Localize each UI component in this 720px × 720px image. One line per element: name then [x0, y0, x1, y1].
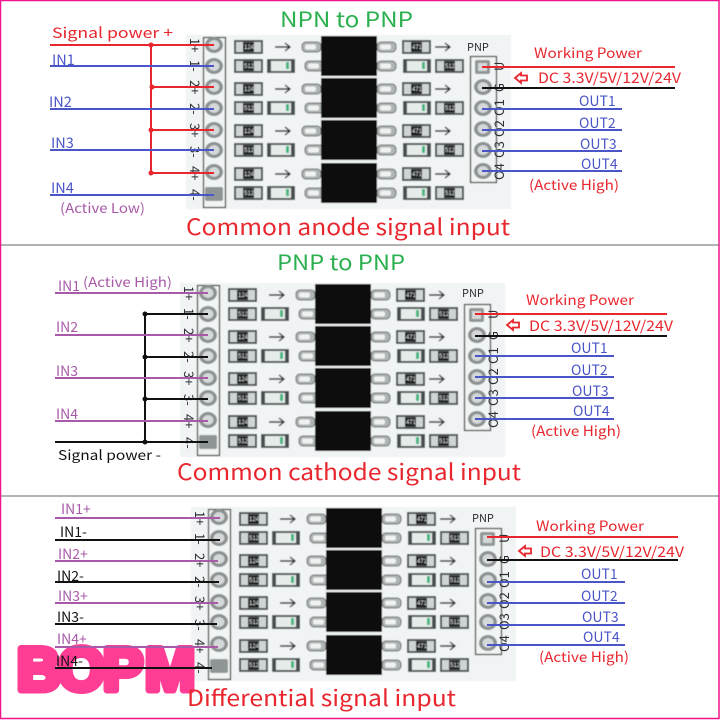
wiring: signal power +: [50, 22, 214, 176]
inputs IN1 to IN4: IN3: [51, 132, 74, 153]
working power and outputs: OUT3: [580, 134, 617, 154]
differential inputs: IN2-: [57, 566, 84, 586]
differential inputs: IN4+: [57, 629, 87, 649]
circuit board 2: 3-: [180, 394, 199, 406]
circuit board 1: O1: [489, 99, 508, 116]
differential inputs: IN1-: [60, 522, 87, 542]
working power and outputs: OUT1: [581, 564, 618, 584]
circuit board 3: 4-: [191, 662, 210, 674]
working power and outputs: OUT1: [579, 91, 616, 111]
circuit board 1: 1-: [186, 60, 205, 72]
inputs IN1 to IN4: [49, 49, 214, 217]
inputs IN1 to IN4: IN3: [56, 361, 78, 381]
circuit board 2: 1+: [180, 286, 199, 300]
working power and outputs: OUT3: [582, 607, 619, 627]
circuit board 1: PNP: [467, 39, 489, 55]
inputs IN1 to IN4: IN2: [49, 91, 72, 112]
working power and outputs: OUT2: [581, 586, 618, 606]
circuit board 2: O2: [483, 368, 502, 385]
inputs IN1 to IN4: IN4: [51, 177, 74, 198]
working power and outputs: Working Power: [534, 43, 643, 63]
circuit board 2: 2-: [180, 351, 199, 363]
circuit board 3: O1: [494, 571, 513, 588]
inputs IN1 to IN4: (Active High): [83, 271, 172, 291]
working power and outputs: DC 3.3V/5V/12V/24V: [529, 315, 674, 336]
circuit board 1: O3: [489, 141, 508, 158]
panel: PNP to PNP: [55, 247, 674, 487]
circuit board 2: PNP: [462, 285, 484, 301]
circuit board 1: 2+: [186, 80, 205, 94]
circuit board 3: U: [494, 534, 513, 543]
circuit board 1: 3-: [186, 146, 205, 158]
circuit board 3: O2: [494, 592, 513, 609]
circuit board 1: 1+: [186, 38, 205, 52]
working power and outputs: OUT4: [583, 627, 620, 647]
circuit board 3: G: [494, 555, 513, 564]
circuit board 3: O3: [494, 613, 513, 630]
working power and outputs: [487, 516, 685, 667]
wiring: signal power -: [55, 312, 208, 464]
working power and outputs: Working Power: [536, 516, 645, 536]
inputs IN1 to IN4: IN1: [58, 276, 80, 296]
working power and outputs: OUT2: [579, 113, 616, 133]
differential inputs: IN3-: [57, 607, 84, 627]
circuit board 1: 2-: [186, 103, 205, 115]
circuit board 1: 4-: [186, 189, 205, 201]
circuit board 2: 3+: [180, 371, 199, 385]
circuit board 2: 2+: [180, 328, 199, 342]
circuit board 2: [180, 283, 505, 457]
circuit board 1: 3+: [186, 123, 205, 137]
differential inputs: IN2+: [58, 544, 88, 564]
circuit board 2: 1-: [180, 308, 199, 320]
circuit board 3: 1+: [191, 511, 210, 525]
circuit board 3: 2+: [191, 553, 210, 567]
working power and outputs: OUT3: [572, 381, 609, 401]
logo: BOPM: BOPM: [17, 636, 195, 703]
working power and outputs: OUT1: [571, 338, 608, 358]
circuit board 1: [186, 35, 511, 209]
working power and outputs: OUT4: [573, 401, 610, 421]
differential inputs: IN4-: [56, 651, 83, 671]
circuit board 3: PNP: [472, 510, 494, 526]
wiring: signal power +: Signal power +: [52, 22, 173, 43]
circuit board 3: 1-: [191, 533, 210, 545]
panel: differential: [17, 499, 685, 713]
circuit board 3: [191, 507, 516, 681]
circuit board 2: 4+: [180, 414, 199, 428]
circuit board 2: 4-: [180, 437, 199, 449]
working power and outputs: OUT4: [581, 154, 618, 174]
inputs IN1 to IN4: IN2: [56, 317, 78, 337]
circuit board 2: U: [483, 310, 502, 319]
circuit board 3: 2-: [191, 576, 210, 588]
circuit board 2: G: [483, 331, 502, 340]
circuit board 2: O1: [483, 347, 502, 364]
working power and outputs: OUT2: [571, 360, 608, 380]
circuit board 3: O4: [494, 635, 513, 652]
panel: NPN to PNP: [49, 4, 682, 242]
circuit board 1: 4+: [186, 166, 205, 180]
working power and outputs: [475, 290, 674, 441]
circuit board 3: 3+: [191, 596, 210, 610]
circuit board 1: O4: [489, 163, 508, 180]
inputs IN1 to IN4: [55, 271, 208, 424]
working power and outputs: DC 3.3V/5V/12V/24V: [540, 541, 685, 562]
circuit board 2: O4: [483, 411, 502, 428]
working power and outputs: Working Power: [526, 290, 635, 310]
differential inputs: [55, 499, 220, 671]
heading: NPN to PNP: NPN to PNP: [280, 4, 413, 34]
working power and outputs: (Active High): [539, 647, 629, 667]
circuit board 1: O2: [489, 120, 508, 137]
circuit board 3: 4+: [191, 639, 210, 653]
circuit board 3: 3-: [191, 619, 210, 631]
circuit board 1: U: [489, 62, 508, 71]
inputs IN1 to IN4: (Active Low): [60, 197, 145, 217]
working power and outputs: DC 3.3V/5V/12V/24V: [538, 67, 682, 88]
working power and outputs: (Active High): [531, 421, 621, 441]
divider: [1, 245, 719, 496]
circuit board 1: G: [489, 83, 508, 92]
inputs IN1 to IN4: IN4: [56, 404, 78, 424]
inputs IN1 to IN4: IN1: [52, 49, 75, 70]
caption: common cathode: Common cathode signal input: [177, 455, 522, 487]
caption: differential: Differential signal input: [187, 681, 457, 713]
working power and outputs: (Active High): [529, 175, 619, 195]
caption: common anode: Common anode signal input: [186, 210, 511, 242]
differential inputs: IN3+: [58, 586, 88, 606]
wiring: signal power -: Signal power -: [58, 444, 161, 464]
circuit board 2: O3: [483, 389, 502, 406]
differential inputs: IN1+: [61, 499, 91, 519]
working power and outputs: [482, 43, 682, 195]
heading: PNP to PNP: PNP to PNP: [277, 247, 405, 277]
